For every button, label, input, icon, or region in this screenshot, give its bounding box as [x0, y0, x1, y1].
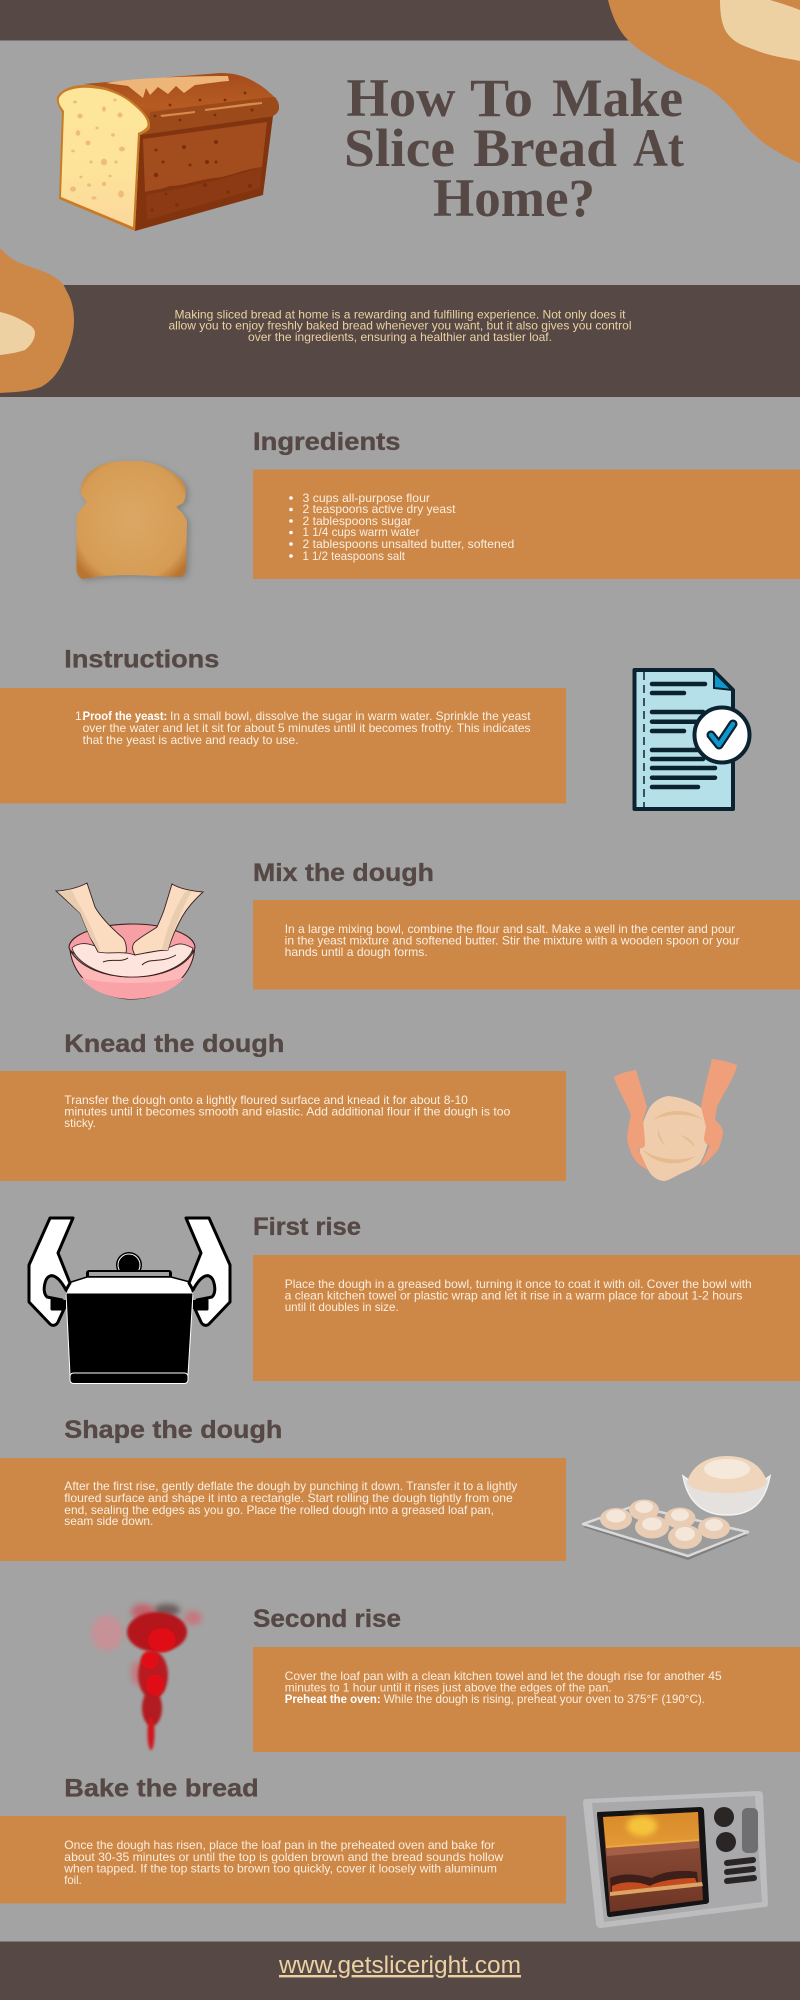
second rise text: While the dough is rising, preheat your oven to 375°F (190°C).: [384, 1692, 705, 1706]
ingredients list: 3 cups all-purpose flour: [302, 491, 430, 505]
icon: checklist document: [634, 670, 750, 809]
first rise text: until it doubles in size.: [285, 1300, 399, 1314]
intro band: [0, 285, 800, 397]
first rise text: a clean kitchen towel or plastic wrap and let it rise in a warm place for about 1-2 hours: [285, 1288, 742, 1302]
first rise text: [285, 1277, 752, 1314]
blob: left: [0, 248, 74, 393]
heading: shape the dough: Shape the dough: [64, 1416, 282, 1444]
instructions text: Proof the yeast:: [83, 709, 167, 723]
ingredients list: 1 1/2 teaspoons salt: [302, 549, 406, 563]
knead text: minutes until it becomes smooth and elastic. Add additional flour if the dough is too: [64, 1104, 511, 1118]
instructions text: 1.: [75, 709, 85, 723]
blob: top right: [608, 0, 800, 163]
icon: hands kneading dough: [614, 1059, 737, 1181]
heading: instructions: Instructions: [64, 646, 219, 674]
panel: mix the dough: [253, 900, 800, 990]
second rise text: [285, 1669, 722, 1706]
icon: hands in bowl: [56, 883, 203, 999]
mix text: hands until a dough forms.: [285, 945, 428, 959]
intro text: allow you to enjoy freshly baked bread whenever you want, but it also gives you control: [168, 318, 632, 332]
title: How: [346, 68, 456, 128]
heading: knead the dough: Knead the dough: [64, 1030, 284, 1058]
second rise text: Cover the loaf pan with a clean kitchen towel and let the dough rise for another 45: [285, 1669, 722, 1683]
intro text: [168, 308, 632, 344]
ingredients list: 2 teaspoons active dry yeast: [302, 502, 456, 516]
title: Bread: [473, 118, 617, 178]
knead text: [64, 1093, 511, 1130]
top band: [0, 0, 800, 40]
heading: bake the bread: Bake the bread: [64, 1774, 259, 1802]
mix text: in the yeast mixture and softened butter. Stir the mixture with a wooden spoon or your: [285, 934, 740, 948]
mix text: In a large mixing bowl, combine the flour and salt. Make a well in the center and pour: [285, 922, 735, 936]
heading: mix the dough: Mix the dough: [253, 859, 434, 887]
instructions text: that the yeast is active and ready to use.: [83, 733, 299, 747]
instructions text: over the water and let it sit for about 5 minutes until it becomes frothy. This indicates: [83, 721, 531, 735]
icon: toast slice: [76, 461, 190, 581]
intro text: Making sliced bread at home is a rewarding and fulfilling experience. Not only does it: [174, 308, 626, 322]
ingredients list: [289, 491, 514, 563]
second rise text: minutes to 1 hour until it rises just above the edges of the pan.: [285, 1680, 612, 1694]
website link: www.getsliceright.com: [278, 1952, 521, 1979]
shape text: After the first rise, gently deflate the dough by punching it down. Transfer it to a lightly: [64, 1479, 517, 1493]
panel: shape the dough: [0, 1458, 566, 1561]
ingredients list: 1 1/4 cups warm water: [302, 525, 420, 539]
ingredients list: 2 tablespoons sugar: [302, 514, 412, 528]
panel: bake the bread: [0, 1816, 566, 1904]
title: Home?: [433, 168, 595, 228]
heading: second rise: Second rise: [253, 1605, 401, 1633]
knead text: sticky.: [64, 1116, 96, 1130]
panel: first rise: [253, 1255, 800, 1381]
title: Slice: [344, 118, 455, 178]
bake text: Once the dough has risen, place the loaf pan in the preheated oven and bake for: [64, 1838, 495, 1852]
title: Make: [552, 68, 683, 128]
first rise text: Place the dough in a greased bowl, turning it once to coat it with oil. Cover the bowl with: [285, 1277, 752, 1291]
mix text: [285, 922, 740, 959]
footer band: [0, 1942, 800, 2000]
icon: bread loaf: [57, 73, 279, 231]
panel: knead the dough: [0, 1071, 566, 1181]
panel: second rise: [253, 1647, 800, 1752]
second rise text: Preheat the oven:: [285, 1692, 381, 1706]
heading: first rise: First rise: [253, 1213, 361, 1241]
icon: red smoke: [91, 1604, 202, 1750]
title: [344, 68, 684, 228]
panel: instructions: [0, 688, 566, 804]
heading: ingredients: Ingredients: [253, 428, 400, 456]
icon: dough balls on tray with bowl: [583, 1456, 770, 1560]
intro text: over the ingredients, ensuring a healthier and tastier loaf.: [248, 330, 552, 344]
bake text: when tapped. If the top starts to brown too quickly, cover it loosely with aluminum: [63, 1862, 497, 1876]
bake text: about 30-35 minutes or until the top is golden brown and the bread sounds hollow: [64, 1850, 504, 1864]
instructions text: [75, 709, 531, 747]
ingredients list: 2 tablespoons unsalted butter, softened: [302, 537, 514, 551]
shape text: [64, 1479, 517, 1528]
icon: oven: [583, 1791, 768, 1928]
title: At: [633, 118, 684, 178]
knead text: Transfer the dough onto a lightly floured surface and knead it for about 8-10: [64, 1093, 468, 1107]
icon: pot held by hands: [29, 1218, 230, 1384]
instructions text: In a small bowl, dissolve the sugar in warm water. Sprinkle the yeast: [170, 709, 531, 723]
panel: ingredients: [253, 470, 800, 579]
title: To: [470, 68, 533, 128]
bake text: foil.: [64, 1873, 82, 1887]
shape text: seam side down.: [64, 1514, 153, 1528]
bake text: [63, 1838, 504, 1887]
shape text: end, sealing the edges as you go. Place the rolled dough into a greased loaf pan,: [64, 1503, 494, 1517]
shape text: floured surface and shape it into a rectangle. Start rolling the dough tightly from one: [64, 1491, 513, 1505]
